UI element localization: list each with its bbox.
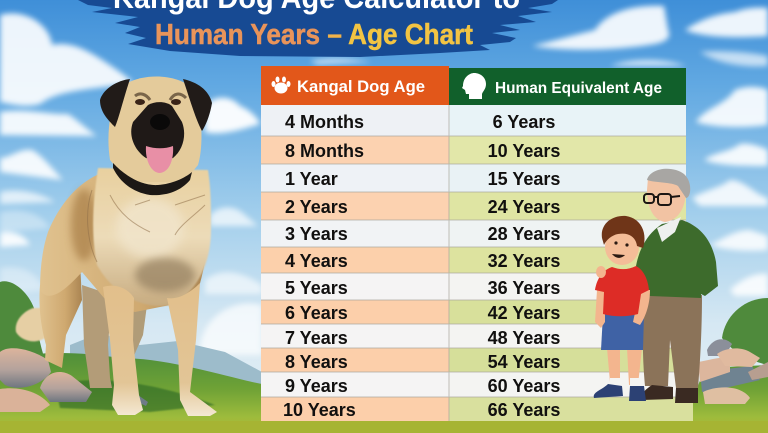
left trees bbox=[0, 281, 45, 365]
dog age column: 3 Years bbox=[285, 224, 348, 244]
collar bbox=[657, 217, 681, 242]
face bbox=[647, 172, 686, 222]
dog age column: 8 Months bbox=[285, 141, 364, 161]
dog illustration bbox=[16, 76, 217, 416]
body bbox=[40, 175, 209, 312]
dog age column: 2 Years bbox=[285, 197, 348, 217]
brow shading bbox=[135, 94, 186, 100]
dark grass shadow bbox=[55, 380, 215, 412]
eyes bbox=[135, 99, 181, 105]
dog age column bbox=[283, 112, 364, 420]
front right leg bbox=[167, 283, 217, 416]
shorts bbox=[601, 314, 644, 350]
saddle shading bbox=[71, 189, 97, 261]
legs bbox=[607, 348, 642, 385]
human age column: 36 Years bbox=[488, 278, 560, 298]
title line two: Human Years – Age Chart bbox=[155, 19, 473, 51]
people illustration bbox=[594, 169, 718, 403]
boy bbox=[594, 216, 650, 401]
nose bbox=[150, 114, 170, 130]
head mane bbox=[108, 76, 201, 182]
smile and eyes bbox=[612, 241, 629, 258]
tail bbox=[16, 308, 45, 341]
human age column: 42 Years bbox=[488, 303, 560, 323]
dog age column: 10 Years bbox=[283, 400, 356, 420]
grandfather bbox=[636, 169, 718, 403]
fur cream centre bbox=[116, 198, 184, 258]
sweater bbox=[636, 220, 718, 298]
ground bbox=[0, 353, 768, 433]
icon: paw bbox=[272, 76, 290, 94]
dog age column: 9 Years bbox=[285, 376, 348, 396]
human age column: 48 Years bbox=[488, 328, 560, 348]
human age column: 32 Years bbox=[488, 251, 560, 271]
brush background bbox=[78, 0, 558, 57]
header: Kangal dog age bbox=[261, 66, 449, 105]
dog age column: 7 Years bbox=[285, 328, 348, 348]
dog age column: 8 Years bbox=[285, 352, 348, 372]
front far leg bbox=[130, 305, 147, 358]
age table bbox=[261, 66, 693, 421]
human age column: 54 Years bbox=[488, 352, 560, 372]
socks bbox=[610, 378, 640, 388]
human age column: 6 Years bbox=[493, 112, 555, 132]
header: human equivalent age bbox=[449, 68, 686, 105]
dog age column: 1 Year bbox=[285, 169, 338, 189]
trousers bbox=[643, 292, 702, 388]
front left leg bbox=[103, 286, 143, 415]
header label: Kangal Dog Age bbox=[297, 77, 425, 96]
row backgrounds bbox=[261, 105, 693, 421]
chest fur bbox=[93, 168, 211, 306]
human age column: 60 Years bbox=[488, 376, 560, 396]
fur lines bbox=[88, 190, 205, 262]
dog age column: 4 Months bbox=[285, 112, 364, 132]
muzzle mask bbox=[131, 102, 184, 162]
title banner bbox=[78, 0, 558, 57]
tongue bbox=[146, 146, 173, 173]
arms bbox=[595, 290, 650, 328]
human age column: 66 Years bbox=[488, 400, 560, 420]
rear far leg bbox=[82, 285, 112, 388]
icon: head bbox=[462, 73, 486, 99]
grandfather hand on shoulder bbox=[596, 266, 606, 278]
glasses bbox=[644, 194, 680, 205]
row dividers bbox=[261, 105, 686, 421]
shirt bbox=[595, 266, 649, 316]
shoes bbox=[642, 385, 698, 403]
human age column: 24 Years bbox=[488, 197, 560, 217]
dog age column: 6 Years bbox=[285, 303, 348, 323]
dog age column: 5 Years bbox=[285, 278, 348, 298]
human age column: 10 Years bbox=[488, 141, 560, 161]
header label: Human Equivalent Age bbox=[495, 80, 662, 97]
right rocks bbox=[698, 339, 768, 404]
hair bbox=[602, 216, 644, 248]
left ear bbox=[100, 79, 130, 127]
collar bbox=[113, 163, 192, 195]
human age column bbox=[488, 112, 560, 420]
right ear bbox=[183, 79, 212, 131]
left rocks bbox=[0, 348, 92, 412]
shoes bbox=[594, 384, 646, 401]
grass strip bbox=[0, 421, 768, 433]
belly shading bbox=[135, 258, 195, 292]
dog age column: 4 Years bbox=[285, 251, 348, 271]
face bbox=[605, 229, 639, 265]
human age column: 28 Years bbox=[488, 224, 560, 244]
hair bbox=[647, 169, 690, 198]
right trees bbox=[722, 298, 768, 365]
rear near leg bbox=[39, 262, 82, 368]
distant hills bbox=[70, 333, 262, 395]
human age column: 15 Years bbox=[488, 169, 560, 189]
